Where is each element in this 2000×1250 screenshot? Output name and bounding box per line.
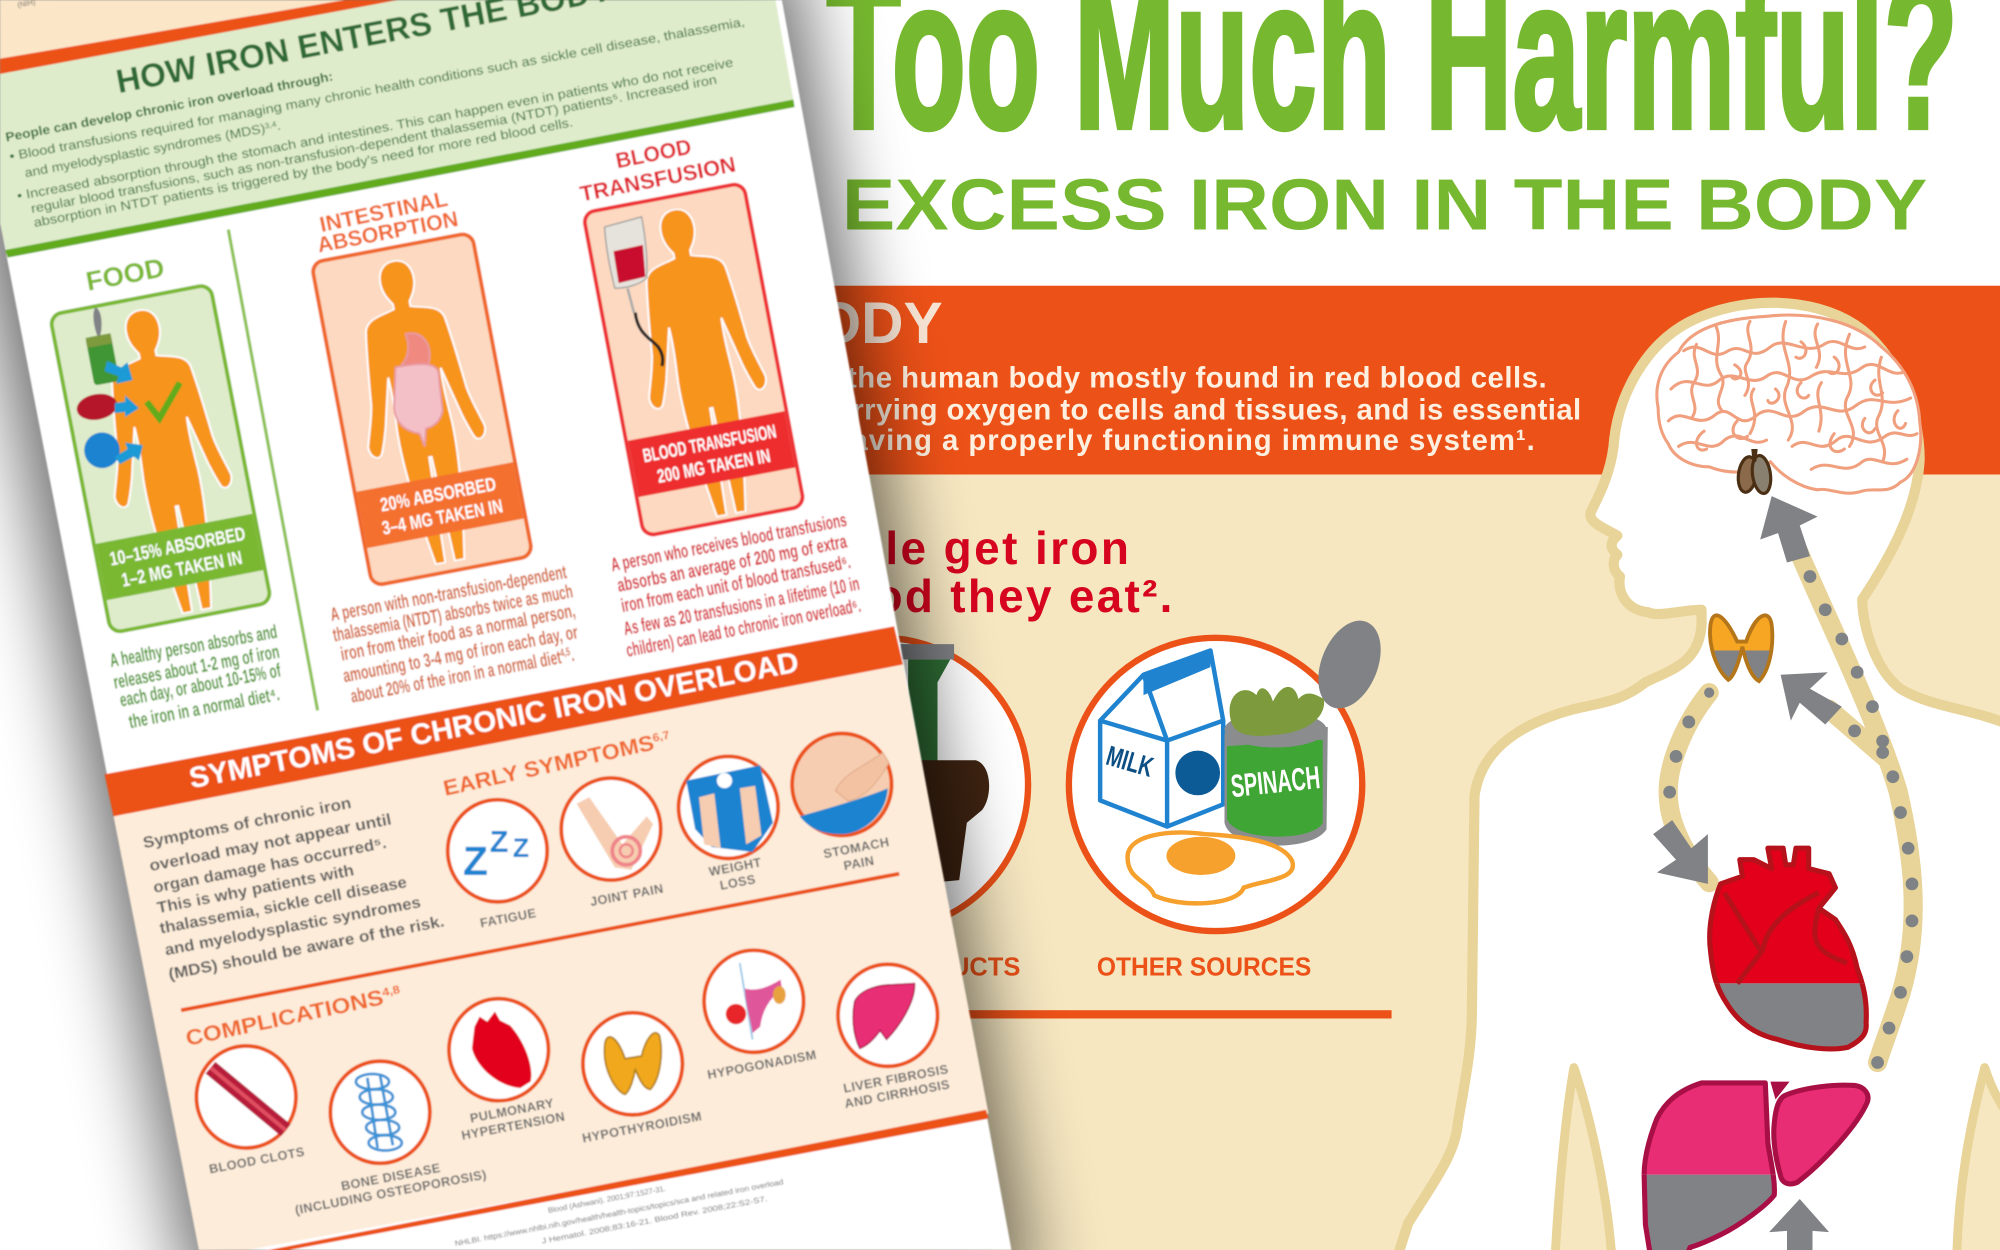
arrow: to heart (1653, 820, 1708, 884)
heading: early symptoms: 6,7 (652, 729, 671, 745)
label: fatigue: FATIGUE (479, 905, 537, 930)
text: symptoms description: and myelodysplastic syndromes (163, 894, 422, 959)
panel: blood transfusion body diagram: 200 MG TAKEN IN (656, 446, 772, 488)
text: overview paragraph: People can develop chronic iron overload through: (4, 69, 334, 145)
heading: symptoms of chronic iron overload: SYMPTOMS OF CHRONIC IRON OVERLOAD (186, 646, 801, 795)
subtitle: EXCESS IRON IN THE BODY (842, 165, 1927, 246)
label: stomach pain: STOMACH (822, 834, 891, 861)
arrow: to liver (1769, 1199, 1829, 1250)
text: food description: releases about 1-2 mg of iron (112, 642, 281, 694)
panel: iron in the body text (402, 291, 1582, 457)
label: meat products: MEAT PRODUCTS (800, 954, 1020, 982)
text: symptoms description: Symptoms of chronic iron (142, 795, 353, 852)
icon: check mark (147, 383, 180, 418)
sheet shadow (0, 0, 1032, 1250)
label: liver fibrosis and cirrhosis (842, 1061, 951, 1111)
arrows: blue food arrows (105, 361, 143, 464)
label: pulmonary hypertension: PULMONARY (469, 1095, 555, 1126)
label: hypogonadism: HYPOGONADISM (706, 1047, 818, 1082)
text: symptoms description: overload may not appear until (148, 811, 393, 875)
panel: food body diagram: 1–2 MG TAKEN IN (120, 548, 244, 592)
iron pathway tubes with dots (1663, 551, 1918, 1069)
text: transfusion description: children) can lead to chronic iron overload⁶. (624, 596, 863, 662)
label: weight loss: WEIGHT (708, 854, 763, 879)
icon: pituitary gland (1736, 449, 1773, 495)
panel: intestinal body diagram (311, 232, 533, 586)
text: symptoms description: thalassemia, sickle cell disease (158, 874, 408, 938)
text: overview paragraph: regular blood transfusions, such as non-transfusion-dependent thalassemia (NTDT) patients⁵. Increased iron (30, 72, 718, 216)
sheet paper (0, 0, 1011, 1250)
text: food description: A healthy person absorbs and (108, 622, 279, 672)
text: transfusion description: absorbs an average of 200 mg of extra (616, 532, 849, 597)
heading: intestinal absorption: ABSORPTION (315, 206, 460, 257)
panel: iron in the body text: IRON IN THE BODY (402, 291, 943, 356)
text: references: J Hematol. 2008;83:16-21. Blood Rev. 2008;22:S2-S7. (541, 1194, 768, 1246)
icon: weight loss (679, 756, 778, 858)
text: overview paragraph: . (275, 118, 282, 133)
icon: liver fibrosis (838, 964, 938, 1066)
text: people get iron (610, 522, 1175, 622)
text: references: NHLBI. https://www.nhlbi.nih.gov/health/health-topics/topics/sca and related iron overload (454, 1177, 784, 1248)
text: food description: each day, or about 10-15% of (118, 661, 283, 712)
text: intestinal description (329, 562, 580, 708)
icon: pulmonary hypertension heart (449, 999, 548, 1101)
icon: digestive system (394, 333, 443, 446)
arm gap left (1555, 1068, 1612, 1250)
label: hypothyroidism: HYPOTHYROIDISM (581, 1108, 703, 1146)
icon: heart (1710, 848, 1866, 1049)
panel: food body diagram (50, 284, 271, 633)
text: intestinal description: . (569, 645, 576, 666)
text: intestinal description: A person with non-transfusion-dependent (329, 562, 569, 626)
heading: blood transfusion: BLOOD (613, 134, 693, 173)
icon: other sources circle (1069, 611, 1393, 931)
text: symptoms description: (MDS) should be aware of the risk. (167, 913, 446, 984)
icon: spinach can: SPINACH (1229, 759, 1322, 804)
text: symptoms description: organ damage has occurred⁵. (152, 835, 388, 897)
heading: blood transfusion: TRANSFUSION (578, 151, 738, 206)
icon: thyroid (1710, 615, 1772, 681)
arm gap right (1957, 1068, 2000, 1250)
figure: body silhouette (1395, 303, 2000, 1250)
text: overview paragraph (4, 14, 746, 230)
text: symptoms description (142, 795, 446, 984)
label: weight loss: LOSS (718, 871, 757, 893)
text: references: Blood (Ashwani). 2001;97:1527-31. (547, 1184, 667, 1215)
icon: fatigue: Z (513, 833, 529, 863)
arrow: to pituitary (1760, 496, 1818, 562)
arrow: to thyroid (1781, 672, 1842, 724)
panel: iron in the body text: Iron is a mineral in the human body mostly found in red blood cells. (569, 362, 1547, 395)
text: overview paragraph: • Blood transfusions required for managing many chronic health conditions such as sickle cell disease, thalassemia, (8, 14, 746, 164)
bottom rule (236, 1110, 989, 1250)
icon: joint pain (561, 778, 661, 880)
label: weight loss (708, 854, 763, 893)
green rule (5, 99, 795, 258)
heading: complications: 4,8 (381, 984, 402, 999)
icon: bone disease (330, 1061, 430, 1163)
text: people get iron: People get iron (763, 522, 1131, 574)
label: pulmonary hypertension: HYPERTENSION (460, 1109, 566, 1143)
icon: liver (1644, 1082, 1868, 1250)
icon: milk carton: MILK (1103, 740, 1157, 783)
text: transfusion description: iron from each unit of blood transfused⁶. (619, 552, 853, 617)
text: overview paragraph: 3,4 (264, 119, 278, 131)
icon: meat products circle (735, 638, 1028, 931)
label: stomach pain: PAIN (842, 853, 876, 873)
icon: hypogonadism (704, 950, 804, 1052)
icon: spinach can (1224, 687, 1328, 846)
text: intestinal description: iron from their food as a normal person, (339, 601, 577, 666)
label: other sources: OTHER SOURCES (1097, 954, 1311, 982)
text: intestinal description: thalassemia (NTDT) absorbs twice as much (331, 581, 575, 646)
icon: stomach pain (792, 733, 892, 835)
text: transfusion description (609, 510, 863, 662)
icon: fatigue: Z (463, 838, 488, 884)
icon: meat (75, 391, 119, 423)
text: people get iron: from the food they eat². (610, 570, 1175, 622)
panel: how iron enters green header (0, 0, 793, 251)
text: intestinal description: amounting to 3-4 mg of iron each day, or (341, 622, 580, 687)
divider: orange (181, 874, 899, 1010)
icon: hypothyroidism (583, 1013, 682, 1115)
icon: can (80, 306, 120, 386)
icon: spoon (1306, 611, 1393, 718)
icon: blood bag (605, 217, 663, 366)
text: intestinal description: 4,5 (559, 646, 572, 660)
text: transfusion description: As few as 20 transfusions in a lifetime (10 in (622, 574, 861, 640)
icon: brain (1657, 315, 1921, 493)
text: food description (108, 622, 283, 733)
icon: fatigue (448, 800, 547, 902)
text: overview paragraph: absorption in NTDT patients is triggered by the body's need for more red blood cells. (32, 114, 574, 230)
panel: blood transfusion body diagram: BLOOD TRANSFUSION (641, 422, 778, 467)
label: blood clots: BLOOD CLOTS (208, 1144, 306, 1176)
panel: top peach strip (0, 0, 344, 59)
label: liver fibrosis and cirrhosis: AND CIRRHOSIS (843, 1076, 951, 1111)
divider (893, 1010, 1392, 1018)
text: intestinal description: about 20% of the iron in a normal diet (349, 624, 688, 708)
panel: left sheet (0, 0, 1011, 1250)
icon: fried egg (1128, 833, 1293, 903)
heading: intestinal absorption: INTESTINAL (317, 186, 450, 237)
label: bone disease: BONE DISEASE (340, 1160, 442, 1193)
panel: iron in the body text: It is vital for carrying oxygen to cells and tissues, and is essential (639, 394, 1582, 427)
text: symptoms description: This is why patients with (156, 862, 356, 917)
icon: milk carton (1100, 651, 1223, 827)
icon: water bottle (84, 432, 120, 468)
heading: food: FOOD (84, 253, 167, 297)
label: bone disease: (INCLUDING OSTEOPOROSIS) (294, 1167, 488, 1217)
panel: food body diagram: 10–15% ABSORBED (108, 524, 247, 571)
heading: complications: COMPLICATIONS (183, 989, 365, 1051)
icon: fatigue: Z (490, 825, 508, 859)
label: liver fibrosis and cirrhosis: LIVER FIBROSIS (842, 1061, 950, 1096)
header band: symptoms (105, 626, 903, 816)
text: transfusion description: A person who receives blood transfusions (609, 510, 849, 576)
panel: intestinal body diagram: 3–4 MG TAKEN IN (380, 496, 505, 540)
text: food description: the iron in a normal diet⁴. (127, 684, 281, 733)
panel: iron in the body text: for having a properly functioning immune system¹. (782, 424, 1536, 457)
panel: intestinal body diagram: 20% ABSORBED (379, 474, 498, 517)
label: stomach pain (822, 834, 891, 873)
orange strip (0, 0, 398, 74)
heading: early symptoms: EARLY SYMPTOMS (441, 733, 642, 801)
panel: symptoms peach area (114, 665, 989, 1250)
label: joint pain: JOINT PAIN (589, 881, 665, 909)
vertical divider (228, 230, 318, 710)
text: overview paragraph: • Increased absorption through the stomach and intestines. This can happen even in patients who do not receive (16, 54, 734, 203)
panel: blood transfusion body diagram (583, 183, 804, 536)
text: overview paragraph: and myelodysplastic syndromes (MDS) (23, 125, 243, 180)
icon: blood clots (196, 1046, 296, 1148)
